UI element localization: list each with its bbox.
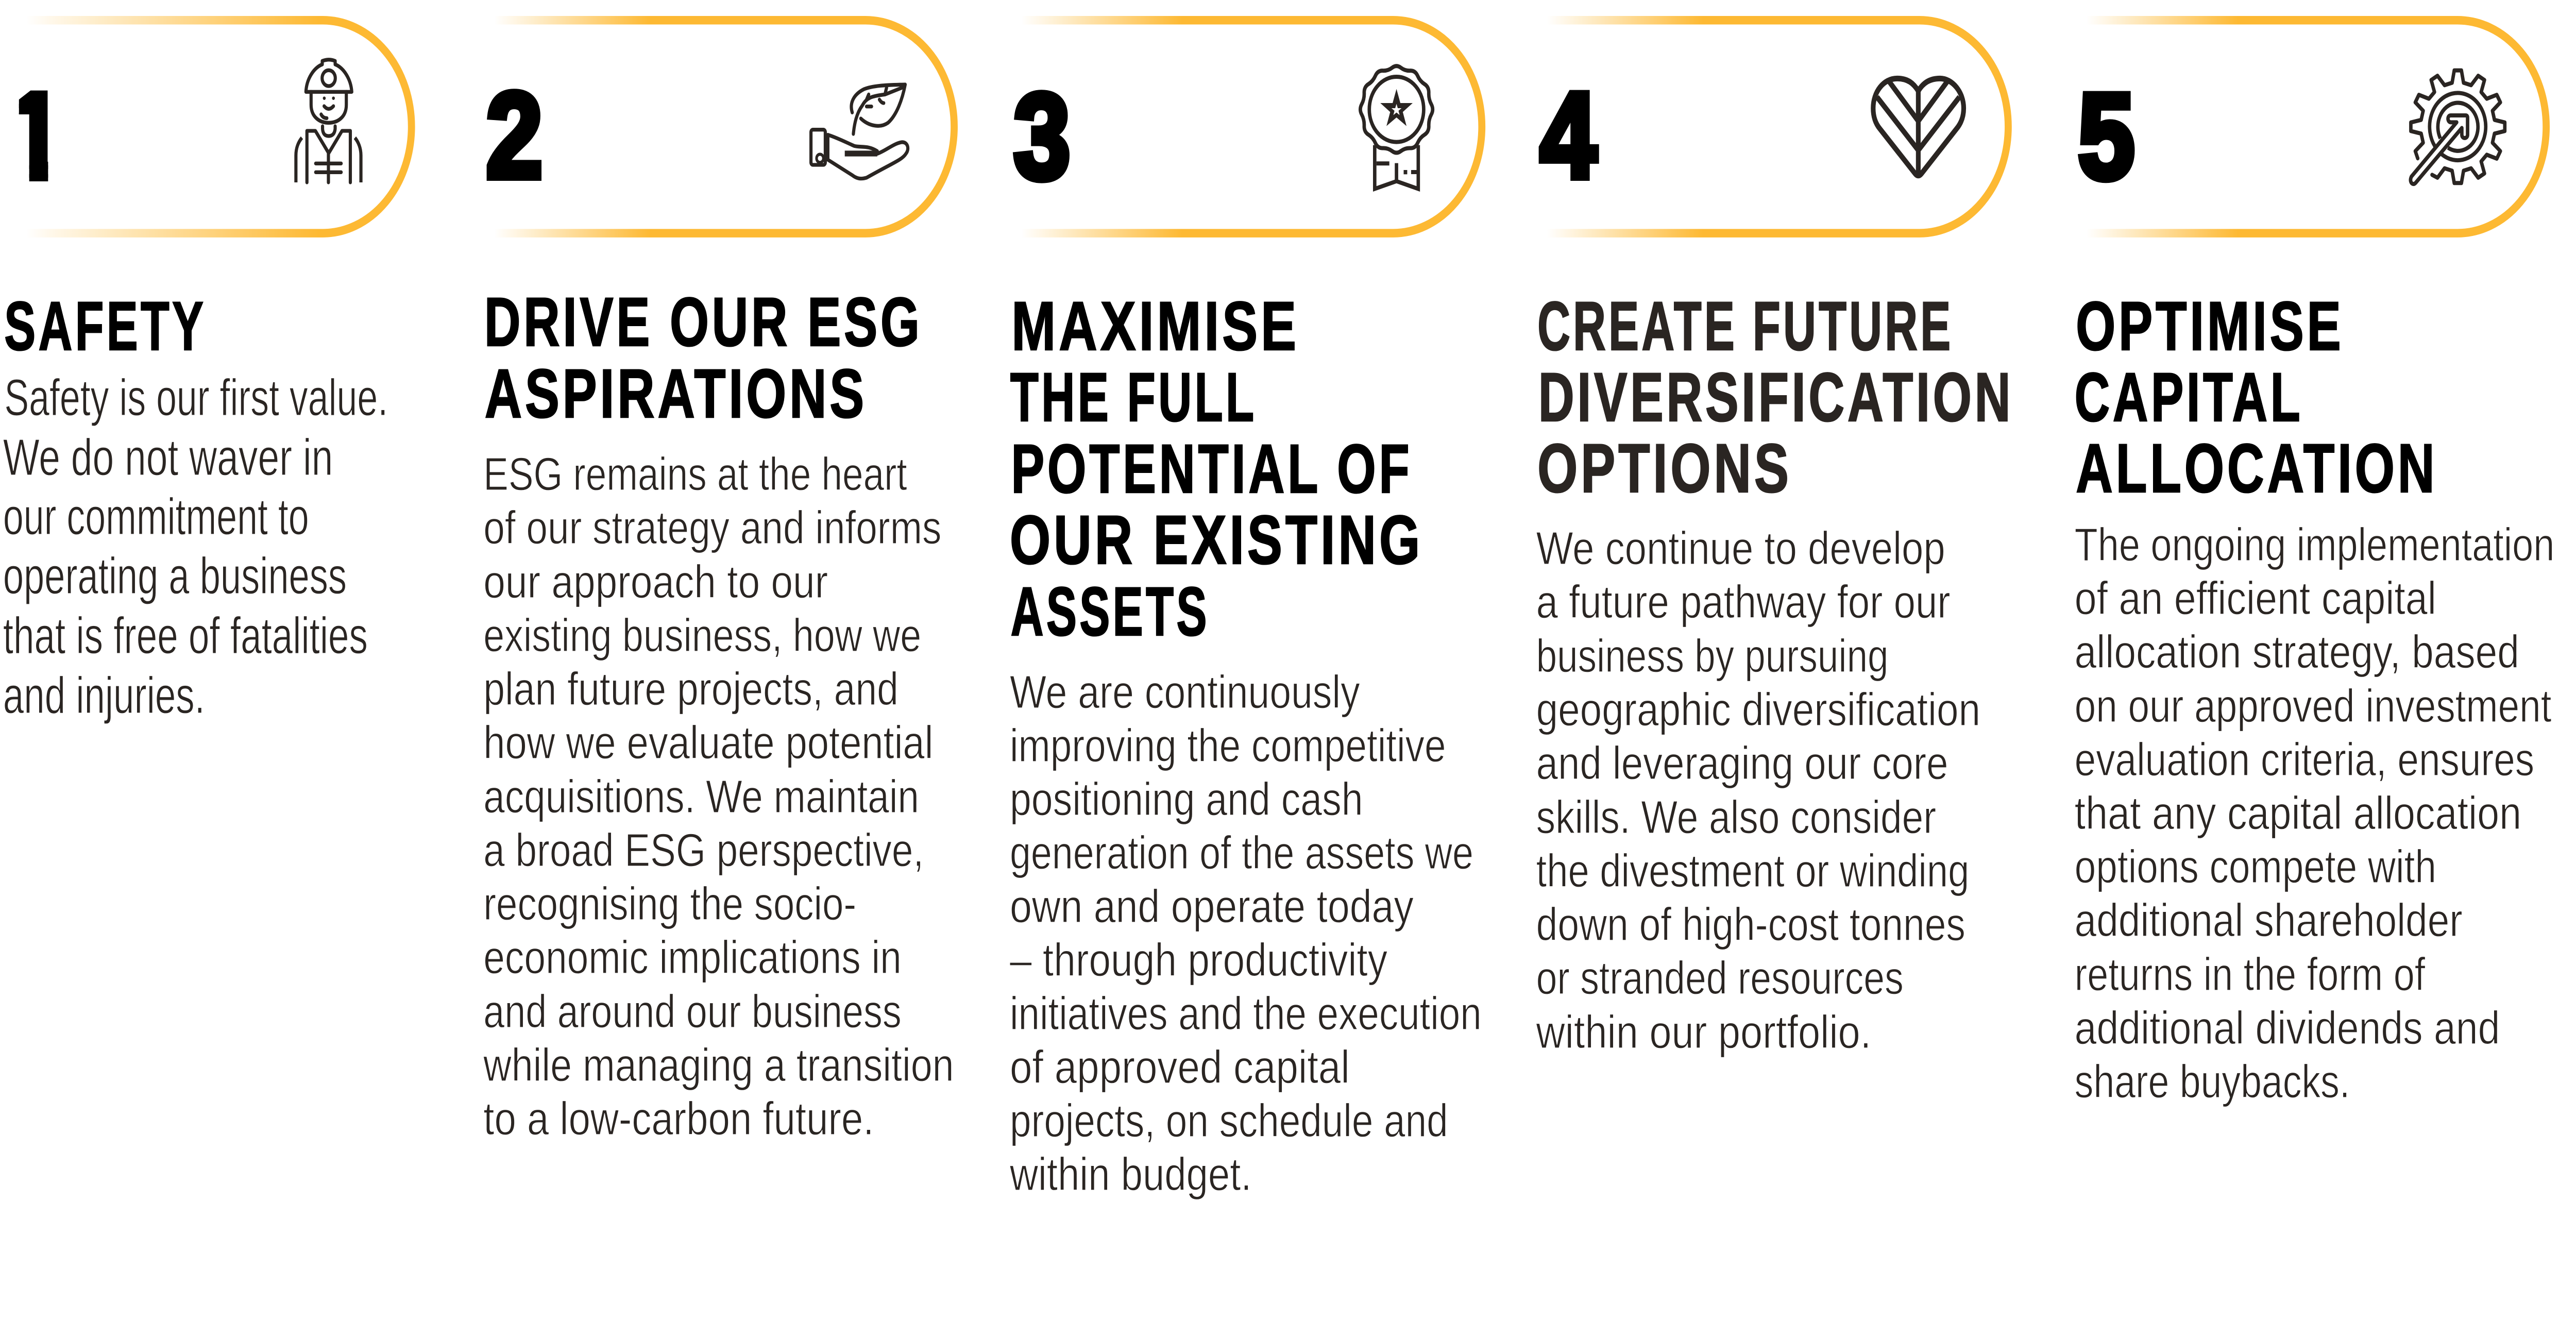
panel: 4 create future diversification options <box>1536 20 2013 1058</box>
body text: create future diversification options: and leveraging our core <box>1536 737 1948 789</box>
panel: 2 drive our ESG aspirations <box>483 20 954 1145</box>
pill outline 4 <box>1547 20 2008 233</box>
pill outline 1 <box>26 20 412 233</box>
body text: optimise capital allocation: on our approved investment <box>2075 680 2551 732</box>
body text: create future diversification options: the divestment or winding <box>1536 845 1969 897</box>
body text: drive our ESG aspirations: recognising the socio- <box>483 878 856 930</box>
heading: optimise capital allocation: ALLOCATION <box>2076 430 2437 507</box>
body text: maximise the full potential: generation of the assets we <box>1010 827 1473 879</box>
body text: safety <box>3 369 388 724</box>
heading: drive our ESG aspirations: DRIVE OUR ESG <box>484 283 923 361</box>
body text: optimise capital allocation: allocation strategy, based <box>2075 626 2519 678</box>
body text: maximise the full potential: positioning and cash <box>1010 773 1363 825</box>
body text: create future diversification options: business by pursuing <box>1536 630 1889 682</box>
body text: drive our ESG aspirations: ESG remains at the heart <box>483 448 907 500</box>
body text: safety: We do not waver in <box>3 429 333 486</box>
body text: create future diversification options: a future pathway for our <box>1536 576 1951 628</box>
body text: maximise the full potential <box>1009 666 1482 1200</box>
body text: create future diversification options: or stranded resources <box>1536 952 1904 1004</box>
icon: miner <box>296 60 361 182</box>
pill outline 3 <box>1021 20 1482 233</box>
icon: heart leaf <box>1873 78 1963 176</box>
body text: create future diversification options: within our portfolio. <box>1536 1006 1871 1058</box>
number 5: 5 <box>2078 69 2134 205</box>
body text: drive our ESG aspirations: acquisitions. We maintain <box>483 771 919 823</box>
body text: optimise capital allocation <box>2075 519 2554 1108</box>
body text: drive our ESG aspirations <box>483 448 954 1145</box>
heading: maximise the full potential of our existing assets: ASSETS <box>1011 573 1210 650</box>
body text: drive our ESG aspirations: to a low-carbon future. <box>483 1093 874 1145</box>
heading: optimise capital allocation: CAPITAL <box>2075 359 2303 436</box>
body text: drive our ESG aspirations: plan future projects, and <box>483 663 899 715</box>
body text: safety: and injuries. <box>3 667 205 724</box>
body text: maximise the full potential: improving the competitive <box>1010 720 1446 772</box>
panel: 5 optimise capital allocation <box>2075 20 2554 1108</box>
body text: optimise capital allocation: that any capital allocation <box>2075 787 2521 839</box>
body text: optimise capital allocation: evaluation criteria, ensures <box>2075 734 2534 786</box>
number 4: 4 <box>1540 67 1597 204</box>
heading: maximise the full potential of our existing assets: MAXIMISE <box>1011 287 1299 365</box>
heading: maximise the full potential of our existing assets: POTENTIAL OF <box>1011 430 1412 507</box>
body text: safety: Safety is our first value. <box>4 369 388 427</box>
body text: drive our ESG aspirations: and around our business <box>483 986 902 1038</box>
heading: drive our ESG aspirations: ASPIRATIONS <box>485 355 867 432</box>
body text: optimise capital allocation: share buybacks. <box>2075 1056 2350 1108</box>
body text: drive our ESG aspirations: existing business, how we <box>483 609 921 662</box>
heading: maximise the full potential of our existing assets: OUR EXISTING <box>1010 501 1423 579</box>
icon: hand and leaf <box>811 84 908 179</box>
body text: maximise the full potential: within budget. <box>1009 1148 1252 1200</box>
body text: create future diversification options: skills. We also consider <box>1536 791 1936 843</box>
body text: maximise the full potential: initiatives and the execution <box>1010 988 1482 1040</box>
body text: maximise the full potential: projects, on schedule and <box>1010 1095 1448 1147</box>
heading: drive our ESG aspirations <box>484 283 923 432</box>
heading: optimise capital allocation <box>2075 287 2437 507</box>
body text: safety: our commitment to <box>3 488 309 546</box>
body text: drive our ESG aspirations: while managing a transition <box>483 1039 954 1091</box>
body text: safety: operating a business <box>3 547 347 605</box>
heading: create future diversification options: OPTIONS <box>1537 430 1792 507</box>
heading: optimise capital allocation: OPTIMISE <box>2076 287 2344 365</box>
heading: create future diversification options <box>1537 287 2013 507</box>
number 3: 3 <box>1014 69 1070 205</box>
body text: drive our ESG aspirations: how we evaluate potential <box>483 717 934 769</box>
heading: maximise the full potential of our existing assets: THE FULL <box>1010 359 1257 436</box>
body text: drive our ESG aspirations: our approach to our <box>483 556 828 608</box>
icon: gear with target arrow <box>2411 71 2505 184</box>
body text: create future diversification options: down of high-cost tonnes <box>1536 899 1965 951</box>
body text: create future diversification options: We continue to develop <box>1536 522 1945 574</box>
body text: optimise capital allocation: The ongoing implementation <box>2075 519 2554 571</box>
body text: maximise the full potential: We are continuously <box>1010 666 1360 718</box>
panel: 3 maximise the full potential <box>1009 20 1482 1200</box>
body text: optimise capital allocation: options compete with <box>2075 841 2436 893</box>
icon: award rosette <box>1360 66 1433 189</box>
heading: maximise the full potential of our existing assets <box>1010 287 1423 650</box>
body text: create future diversification options <box>1536 522 1980 1058</box>
body text: maximise the full potential: own and operate today <box>1010 880 1414 933</box>
pill outline 2 <box>494 20 954 233</box>
body text: safety: that is free of fatalities <box>3 607 368 665</box>
heading: create future diversification options: DIVERSIFICATION <box>1538 359 2013 436</box>
number 1: 1 <box>7 68 63 204</box>
heading: create future diversification options: CREATE FUTURE <box>1537 287 1953 365</box>
body text: optimise capital allocation: additional dividends and <box>2075 1002 2500 1054</box>
body text: optimise capital allocation: returns in the form of <box>2075 949 2426 1001</box>
body text: drive our ESG aspirations: of our strategy and informs <box>483 502 941 554</box>
body text: maximise the full potential: of approved capital <box>1010 1041 1350 1093</box>
pill outline 5 <box>2087 20 2546 233</box>
body text: optimise capital allocation: additional shareholder <box>2075 894 2463 946</box>
body text: optimise capital allocation: of an efficient capital <box>2075 572 2436 624</box>
panel: 1 safety <box>3 20 412 724</box>
body text: maximise the full potential: – through productivity <box>1010 934 1388 986</box>
body text: drive our ESG aspirations: a broad ESG perspective, <box>483 824 924 876</box>
body text: drive our ESG aspirations: economic implications in <box>483 932 902 984</box>
number 2: 2 <box>486 67 543 204</box>
heading: safety: SAFETY <box>4 287 206 365</box>
body text: create future diversification options: geographic diversification <box>1536 684 1980 736</box>
